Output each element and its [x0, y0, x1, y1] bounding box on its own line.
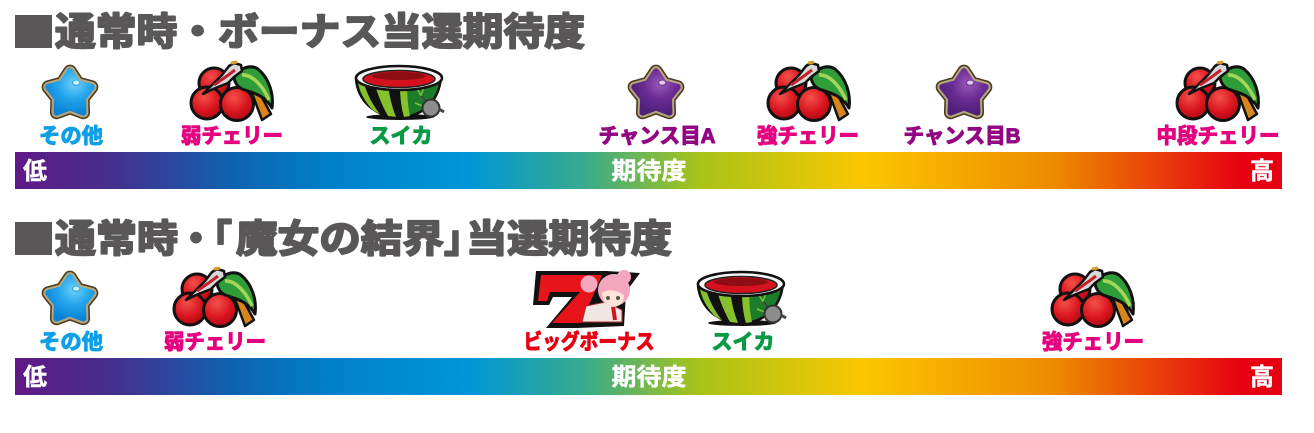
icon: weak cherry: [174, 268, 255, 326]
gradient bar 2: 高: [1250, 364, 1274, 391]
label: chance B: チャンス目B: [904, 125, 1020, 148]
icon: watermelon: [356, 66, 444, 120]
title: witch barrier expectation: 当選期待度: [466, 219, 672, 261]
row 2 symbols: [48, 268, 1133, 328]
label: strong cherry: 強チェリー: [757, 125, 859, 148]
gradient bar 1: 期待度: [612, 158, 686, 185]
title: witch barrier expectation: 通常時: [55, 219, 178, 261]
label: watermelon: スイカ: [370, 125, 432, 148]
row 2 labels: [39, 330, 1144, 354]
gradient bar 2: 期待度: [612, 364, 686, 391]
label: strong cherry: 強チェリー: [1042, 331, 1144, 354]
gradient bar 2: [15, 358, 1282, 395]
icon: purple star A: [634, 71, 678, 112]
icon: watermelon: [698, 272, 786, 326]
title: witch barrier expectation: [15, 219, 672, 261]
gradient bar 2: 低: [23, 364, 47, 391]
label: chance A: チャンス目A: [598, 125, 716, 148]
row 1 symbols: [48, 62, 1258, 120]
label: weak cherry: 弱チェリー: [181, 125, 283, 148]
label: middle cherry: 中段チェリー: [1156, 125, 1280, 148]
title: witch barrier expectation: 魔女の結界: [236, 219, 444, 261]
title: normal-time bonus expectation: 通常時・ボーナス当選期待度: [55, 12, 585, 54]
label: other: その他: [39, 125, 103, 148]
label: weak cherry: 弱チェリー: [164, 331, 266, 354]
icon: purple star B: [942, 71, 986, 112]
row 1 labels: [39, 125, 1280, 148]
label: big bonus: ビッグボーナス: [524, 330, 654, 354]
icon: weak cherry: [191, 62, 272, 120]
icon: blue star: [48, 71, 92, 112]
title: witch barrier expectation: ・: [177, 219, 215, 261]
gradient bar 1: 高: [1250, 158, 1274, 185]
title: witch barrier expectation: 「: [194, 219, 232, 261]
icon: strong cherry: [1052, 268, 1133, 326]
label: other: その他: [39, 331, 103, 354]
icon: middle cherry: [1177, 62, 1258, 120]
icon: strong cherry: [768, 62, 849, 120]
label: watermelon: スイカ: [712, 331, 774, 354]
icon: big bonus seven with pink-haired character: [533, 270, 640, 328]
title: witch barrier expectation: 」: [444, 219, 482, 261]
icon: blue star: [48, 277, 92, 318]
gradient bar 1: [15, 152, 1282, 189]
gradient bar 1: 低: [23, 158, 47, 185]
